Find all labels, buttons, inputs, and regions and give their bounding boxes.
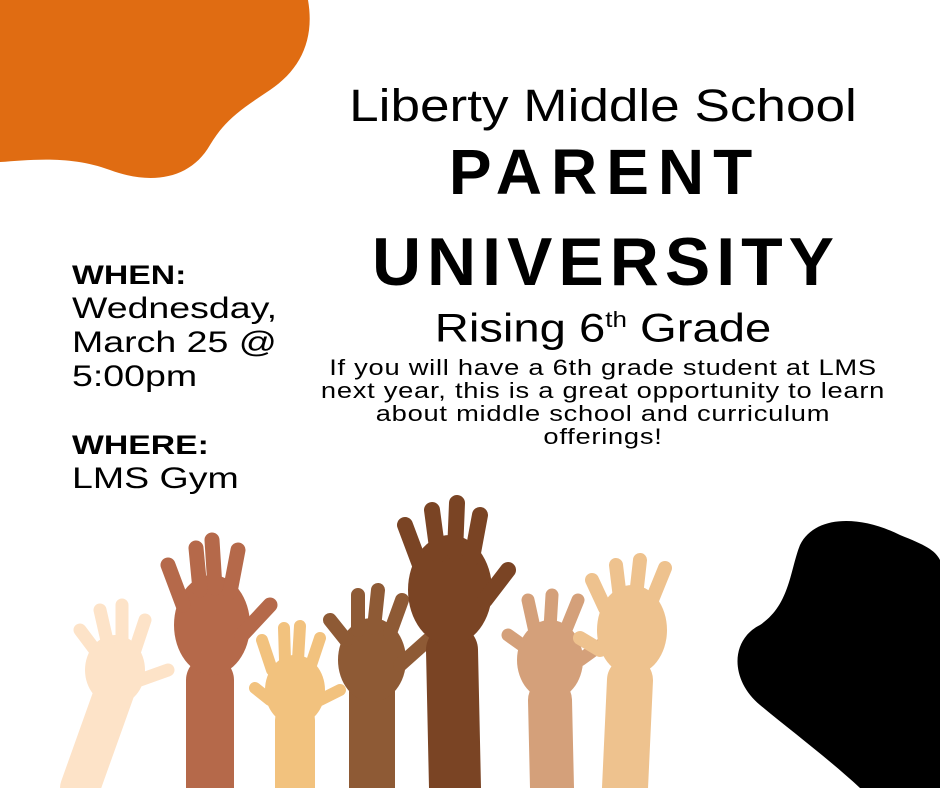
text: description	[321, 355, 885, 449]
hand 1 light	[80, 605, 168, 788]
text: description: offerings!	[543, 424, 663, 449]
text: description: about middle school and curriculum	[376, 401, 830, 426]
text: description: If you will have a 6th grade student at LMS	[329, 355, 877, 380]
subheading: Rising 6th Grade	[435, 306, 771, 350]
heading: UNIVERSITY: UNIVERSITY	[372, 224, 840, 300]
text: when/where: LMS Gym	[72, 462, 239, 495]
text: when/where: 5:00pm	[72, 360, 197, 393]
text: when/where: WHERE:	[72, 430, 209, 460]
blob: black bottom-right	[738, 521, 940, 788]
blob: orange top-left	[0, 0, 310, 178]
hand 7	[580, 560, 667, 788]
hand 4	[330, 590, 428, 788]
hand 3	[255, 626, 340, 788]
text: description: next year, this is a great opportunity to learn	[321, 378, 885, 403]
hand 5	[405, 503, 508, 788]
hand 6	[508, 595, 605, 788]
text: when/where: March 25 @	[72, 326, 277, 359]
text: when/where: WHEN:	[72, 260, 186, 290]
hand 2	[168, 540, 270, 788]
heading: PARENT: PARENT	[449, 136, 761, 208]
text: when/where: Wednesday,	[72, 292, 277, 325]
text: when/where	[72, 260, 277, 495]
title: school name: Liberty Middle School	[349, 80, 857, 131]
